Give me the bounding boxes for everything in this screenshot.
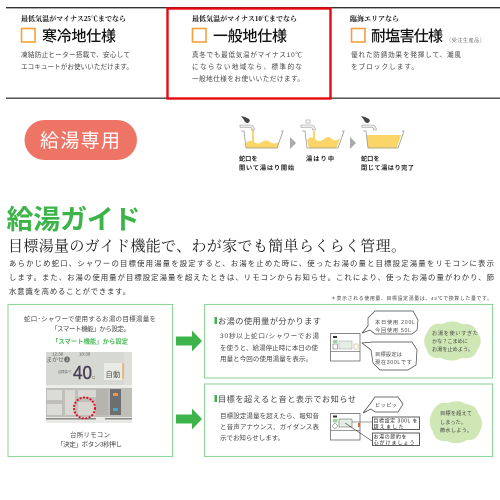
alert description: と音声アナウンス、ガイダンス表	[220, 422, 320, 431]
cloud tip: use less	[424, 322, 481, 360]
panel: smart function setup	[8, 304, 172, 456]
step 1: open tap	[239, 116, 295, 172]
photo: kitchen remote: 10:30	[79, 352, 91, 356]
photo caption: 台所リモコン	[70, 430, 110, 439]
icon: remote display	[330, 334, 360, 361]
cold spec description: エコキュートがお使いいただけます。	[21, 62, 133, 71]
cold spec title: 寒冷地仕様	[42, 28, 116, 45]
speech bubble: target setting	[362, 342, 417, 370]
usage description: を使うと、給湯停止時に本日の使	[220, 343, 318, 352]
standard spec title: 一般地仕様	[213, 28, 287, 45]
badge: hot water only: 給湯専用	[40, 130, 120, 152]
speech bubble: target setting: 目標設定は	[375, 350, 402, 358]
step 2: filling	[301, 120, 344, 163]
cloud tip: use less: お湯を使いすぎた	[432, 329, 478, 337]
standard spec description: 真冬でも最低気温がマイナス10℃	[192, 50, 302, 59]
step 3: close tap	[361, 116, 414, 172]
cold spec description: 凍結防止ヒーター搭載で、安心して	[21, 50, 130, 59]
icon: cold spec checkbox	[22, 28, 35, 42]
speech bubble: today's usage: 今回使用 50L	[375, 326, 411, 334]
step 3 caption	[361, 155, 414, 172]
photo caption	[57, 430, 122, 448]
step 1 caption	[239, 155, 295, 172]
red highlight frame	[168, 8, 330, 98]
cloud tip: save water: しまった。	[440, 419, 466, 426]
callout: target exceeded	[372, 417, 420, 430]
cloud tip: save water	[430, 401, 482, 443]
alert description: 示でお知らせします。	[220, 433, 284, 442]
photo: kitchen remote: 40	[73, 363, 92, 383]
panel: cold-region spec	[21, 14, 133, 71]
callout: save water: 心がけましょう	[374, 440, 414, 446]
cloud tip: use less: お湯を止めよう。	[432, 345, 473, 353]
salt spec description	[351, 50, 461, 71]
cold spec condition: 最低気温がマイナス25℃までなら	[21, 14, 126, 23]
build-to-order note: （受注生産品）	[446, 36, 485, 44]
diagram: bath filling steps	[239, 116, 414, 172]
setup instructions: 蛇口･シャワーで使用するお湯の目標湯量を	[24, 314, 156, 323]
badge: hot water only	[24, 120, 137, 160]
subheading: 目標湯量のガイド機能で、わが家でも簡単らくらく管理。	[8, 237, 406, 255]
standard spec description: 一般地仕様をお使いいただけます。	[192, 74, 304, 83]
photo: kitchen remote	[46, 352, 132, 423]
green subheading: 「スマート機能」から設定	[52, 336, 129, 346]
photo caption: 「決定」ボタン3秒押し	[57, 440, 122, 448]
speech bubble: beep: ピッピッ	[375, 402, 397, 409]
panel: standard spec highlighted	[168, 8, 330, 98]
panel: salt-resistant spec	[350, 14, 485, 71]
salt spec title: 耐塩害仕様	[371, 28, 443, 45]
heading: hot water guide: 給湯ガイド	[6, 205, 140, 235]
arrow: step 2 to 3	[350, 137, 356, 149]
usage description: 30秒以上蛇口/シャワーでお湯	[220, 331, 320, 340]
usage description: 用量と今回の使用湯量を表示。	[220, 354, 312, 363]
setup instructions: 「スマート機能」から設定。	[51, 324, 130, 333]
callout: save water	[372, 433, 420, 446]
cloud tip: use less: かな？こまめに	[432, 338, 468, 345]
arrow: to usage panel	[176, 330, 202, 352]
photo: kitchen remote: 自動	[106, 369, 121, 379]
setup instructions	[24, 314, 156, 333]
usage description	[220, 331, 320, 363]
step 3 caption: 閉じて湯はり完了	[361, 164, 414, 172]
callout: target exceeded: 超えました	[374, 424, 404, 430]
salt spec description: 優れた防錆効果を発揮して、潮風	[351, 50, 461, 59]
intro paragraph: 水意識を高めることができます。	[9, 287, 130, 296]
step 3 caption: 蛇口を	[361, 155, 380, 163]
icon: salt spec checkbox	[352, 28, 365, 42]
step 1 caption: 蛇口を	[239, 155, 258, 163]
alert description	[220, 411, 320, 442]
photo: kitchen remote: C	[92, 375, 96, 380]
speech bubble: target setting: 現在300Lです	[375, 358, 412, 366]
photo: kitchen remote: 12:30	[52, 352, 64, 356]
callout: target exceeded: 目標設定 300L を	[374, 418, 418, 424]
intro paragraph: します。また、お湯の使用量が目標設定湯量を超えたときは、リモコンからお知らせ。これにより、使ったお湯の量がわかり、節	[9, 273, 494, 282]
red dotted highlight	[74, 398, 95, 418]
arrow: to over-target panel	[176, 408, 202, 430]
step 2 caption: 湯はり中	[306, 155, 334, 163]
intro paragraph	[9, 259, 494, 296]
salt spec description: をブロックします。	[351, 62, 418, 71]
speech bubble: beep	[363, 397, 403, 413]
intro paragraph: あらかじめ蛇口、シャワーの目標使用湯量を設定すると、お湯を止めた時に、使ったお湯の量と目標設定湯量をリモコンに表示	[9, 259, 494, 268]
standard spec description	[192, 50, 304, 83]
photo: kitchen remote: 目標量/℃	[58, 369, 72, 374]
step 1 caption: 開いて湯はり開始	[239, 164, 295, 172]
standard spec description: にならない地域なら、標準的な	[192, 62, 302, 71]
cold spec description	[21, 50, 133, 71]
salt spec condition: 臨海エリアなら	[350, 14, 399, 23]
panel: over-target alert	[204, 384, 492, 456]
usage panel heading: お湯の使用量が分かります	[218, 316, 321, 326]
footnote: ＊表示される使用量、目標設定湯量は、42℃で換算した量です。	[331, 295, 492, 302]
alert description: 目標設定湯量を超えたら、報知音	[220, 411, 320, 420]
icon: standard spec checkbox	[192, 28, 206, 42]
icon: remote with callouts	[330, 414, 372, 441]
alert panel heading: 目標を超えると音と表示でお知らせ	[218, 394, 356, 404]
arrow: step 1 to 2	[290, 137, 296, 149]
standard spec condition: 最低気温がマイナス10℃までなら	[192, 14, 297, 23]
cloud tip: save water: 節水しよう。	[440, 426, 472, 434]
cloud tip: save water: 目標を超えて	[440, 409, 472, 417]
speech bubble: today's usage	[362, 311, 418, 334]
callout: save water: お湯の節約を	[374, 434, 406, 440]
panel: usage display	[204, 304, 492, 378]
speech bubble: today's usage: 本日使用 200L	[375, 318, 415, 326]
photo: kitchen remote: まかせ❸	[46, 356, 70, 364]
